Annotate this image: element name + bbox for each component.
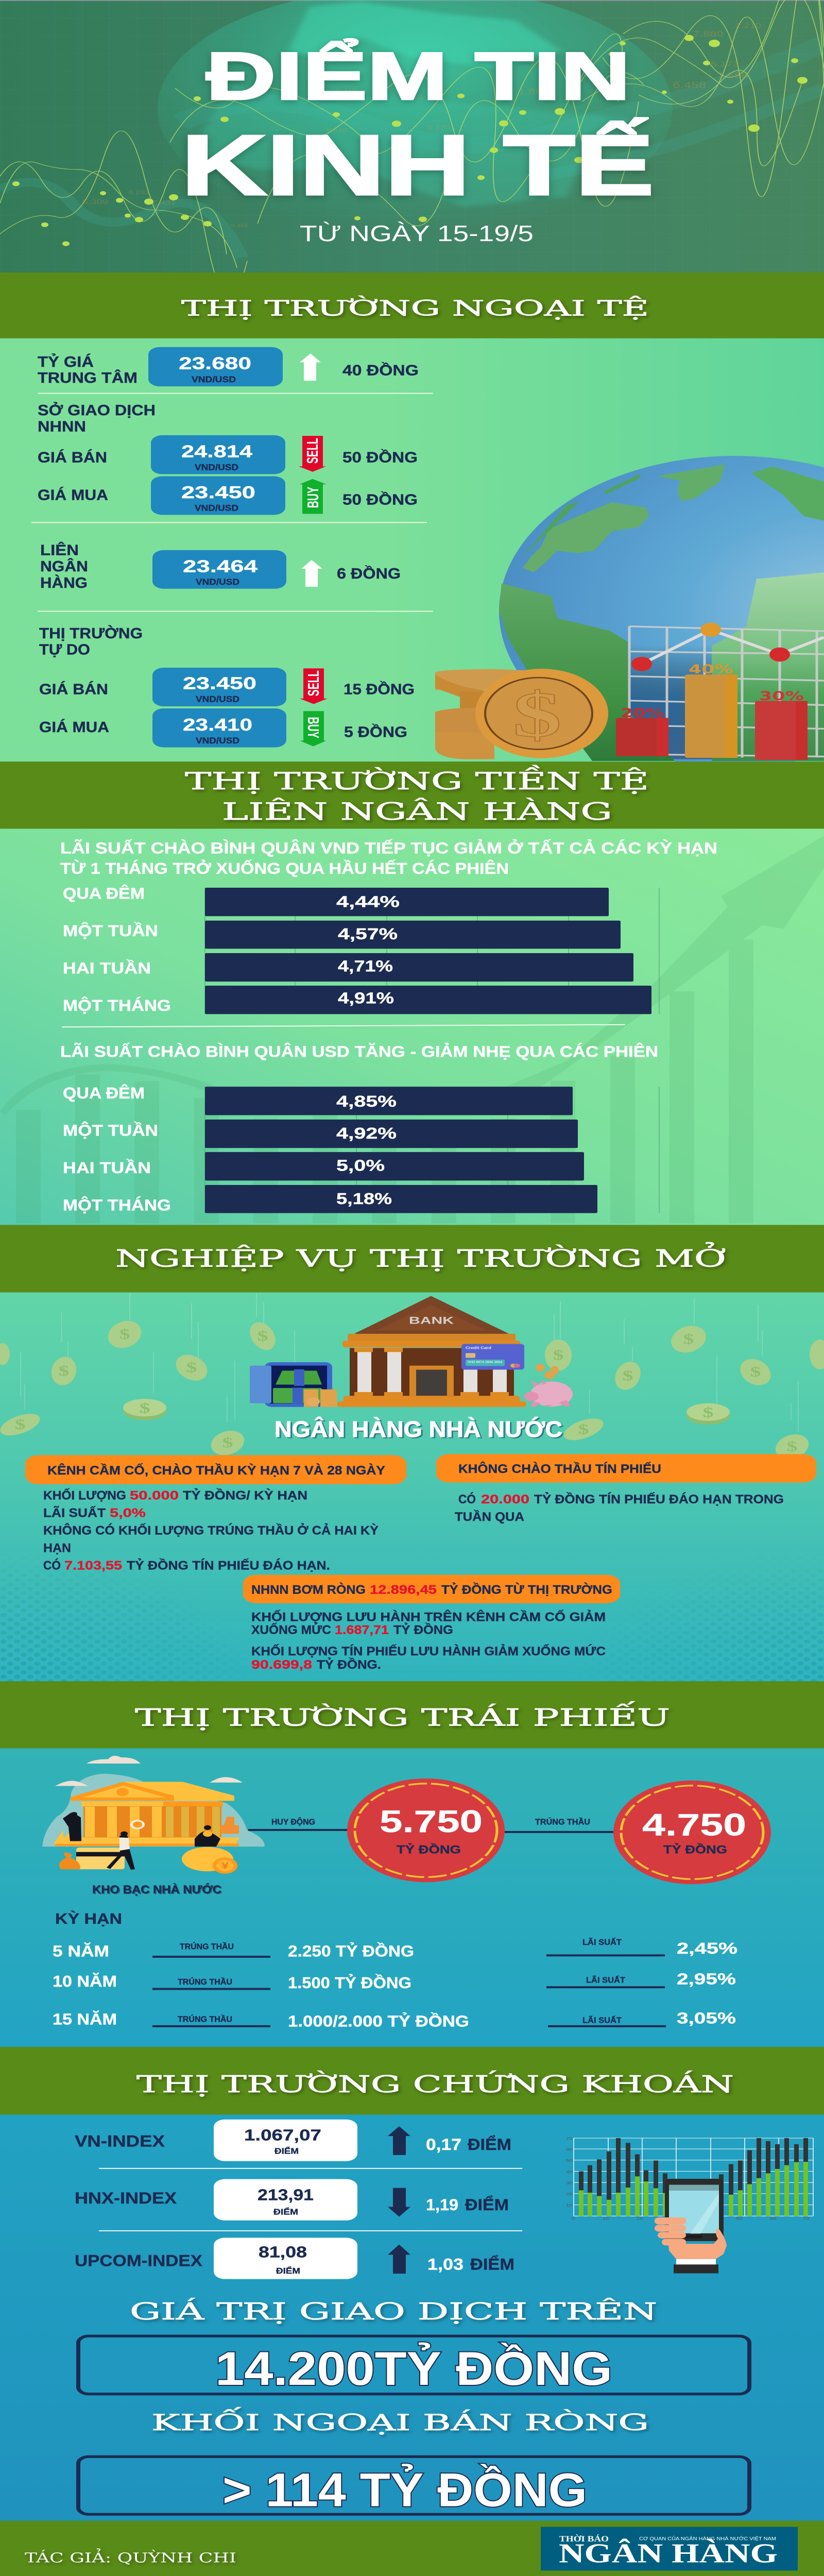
bar chart: VND rates: HAI TUẦN: [63, 959, 151, 977]
chart: stock bars: 70: [566, 2137, 572, 2141]
panel: header background: [0, 0, 824, 273]
table row: 10 years: TRÚNG THẦU: [178, 1977, 232, 1987]
bar chart: USD rates: 4,85%: [336, 1093, 397, 1110]
panel: collateral channel: 50.000: [130, 1489, 179, 1502]
logo: Thoi bao Ngan hang: [541, 2527, 798, 2570]
callout: foreign net sell: > 114 TỶ ĐỒNG: [222, 2463, 587, 2517]
row: free market rates: [39, 624, 415, 748]
decoration: floating coins: $: [222, 1434, 233, 1450]
row: free market rates: VND/USD: [196, 695, 239, 704]
chart decoration: small numbers: 2.210: [735, 22, 761, 29]
row: interbank rate: 6 ĐỒNG: [337, 565, 401, 582]
bar chart: VND rates: 4,71%: [338, 958, 393, 975]
row: VN-Index: 1.067,07: [244, 2127, 321, 2144]
chart decoration: small numbers: 5.173: [711, 60, 739, 68]
icon: credit card: [461, 1344, 524, 1370]
chart decoration: small numbers: 5.648: [327, 127, 347, 133]
table row: 15 years: LÃI SUẤT: [582, 2015, 622, 2025]
panel: net injection: NHNN BƠM RÒNG: [251, 1582, 366, 1597]
table row: 5 years: 5 NĂM: [53, 1942, 109, 1960]
illustration: globe with chart and coins: 40%: [689, 663, 733, 676]
heading: state bank: NGÂN HÀNG NHÀ NƯỚC: [276, 1417, 564, 1443]
row: free market rates: 15 ĐỒNG: [344, 681, 415, 698]
chart: stock bars: 70: [803, 2216, 809, 2221]
row: interbank rate: NGÂN: [40, 558, 88, 574]
row: HNX-Index: 1,19: [426, 2195, 458, 2214]
logo: Thoi bao Ngan hang: THỜI BÁO: [559, 2534, 609, 2544]
row: VN-Index: VN-INDEX: [75, 2132, 165, 2150]
chart decoration: small numbers: [82, 22, 761, 228]
icon: credit card: Credit Card: [466, 1346, 491, 1350]
row: central rate: [38, 347, 419, 386]
panel: net injection: [243, 1575, 620, 1671]
bar chart: USD rates: MỘT THÁNG: [63, 1196, 171, 1214]
table row: 5 years: TRÚNG THẦU: [180, 1942, 234, 1951]
bar chart: USD rates: QUA ĐÊM: [63, 1084, 145, 1102]
panel: collateral channel: TỶ ĐỒNG TÍN PHIẾU ĐÁO HẠN.: [127, 1558, 330, 1572]
table row: 10 years: [53, 1971, 736, 1992]
table row: 10 years: 10 NĂM: [53, 1973, 117, 1990]
panel: collateral channel: LÃI SUẤT: [43, 1506, 106, 1520]
table row: 15 years: [53, 2010, 736, 2030]
chart decoration: small numbers: 6.262: [129, 189, 149, 195]
decoration: floating coins: [0, 1318, 824, 1463]
decoration: floating coins: $: [258, 1328, 268, 1344]
table row: 10 years: 2,95%: [677, 1971, 736, 1988]
illustration: globe with chart and coins: 30%: [759, 689, 804, 703]
decoration: floating coins: $: [553, 1347, 563, 1363]
panel: no bill offering: 20.000: [481, 1493, 529, 1506]
row: HNX-Index: ĐIỂM: [465, 2195, 509, 2214]
panel: collateral channel: TỶ ĐỒNG/ KỲ HẠN: [183, 1488, 307, 1502]
row: SBV exchange rates: GIÁ MUA: [38, 486, 108, 503]
chart decoration: small numbers: 7.431: [152, 199, 176, 206]
title: [181, 39, 654, 213]
row: free market rates: 23.410: [183, 715, 252, 735]
panel: foreign exchange body: [0, 338, 824, 761]
row: interbank rate: HÀNG: [40, 574, 88, 591]
table row: 10 years: LÃI SUẤT: [586, 1976, 625, 1985]
row: SBV exchange rates: GIÁ BÁN: [38, 449, 107, 466]
row: free market rates: 23.450: [183, 674, 256, 693]
row: central rate: TRUNG TÂM: [38, 369, 138, 386]
decoration: floating coins: $: [140, 1400, 150, 1416]
table row: 5 years: 2,45%: [677, 1940, 737, 1957]
panel: no bill offering: CÓ: [458, 1492, 476, 1506]
decoration: floating coins: $: [15, 1416, 25, 1432]
table row: 15 years: 1.000/2.000 TỶ ĐỒNG: [288, 2012, 469, 2030]
chart: stock bars: 10: [566, 2204, 572, 2207]
table row: 10 years: 1.500 TỶ ĐỒNG: [288, 1974, 411, 1992]
row: SBV exchange rates: NHNN: [38, 418, 86, 435]
logo: Thoi bao Ngan hang: CƠ QUAN CỦA NGÂN HÀNG NHÀ NƯỚC VIỆT NAM: [639, 2536, 776, 2541]
icon: credit card: 7643 8974 3846 3864: [467, 1361, 502, 1364]
connector: raised: HUY ĐỘNG: [271, 1817, 315, 1826]
heading: money market: LIÊN NGÂN HÀNG: [222, 797, 612, 825]
callout: winning amount: [613, 1781, 771, 1884]
row: free market rates: BUY: [304, 717, 322, 738]
connector: winning: TRÚNG THẦU: [535, 1817, 590, 1826]
illustration: globe with chart and coins: $: [513, 679, 561, 750]
bar chart: VND rates: [63, 885, 659, 1014]
row: VN-Index: ĐIỂM: [274, 2146, 299, 2156]
callout: raised amount: [347, 1778, 505, 1882]
heading: state bank: NGÂN HÀNG NHÀ NƯỚC: [274, 1416, 562, 1442]
row: UPCOM-Index: 81,08: [259, 2244, 307, 2261]
row: HNX-Index: 213,91: [258, 2187, 314, 2204]
date subtitle: TỪ NGÀY 15-19/5: [300, 221, 534, 246]
bar chart: VND rates: 4,57%: [338, 926, 398, 943]
title: ĐIỂM TIN: [206, 39, 630, 114]
panel: net injection: KHỐI LƯỢNG TÍN PHIẾU LƯU HÀNH GIẢM XUỐNG MỨC: [251, 1644, 606, 1658]
chart decoration: waves and dots: [0, 0, 824, 296]
row: UPCOM-Index: ĐIỂM: [276, 2266, 300, 2276]
chart: stock bars: 10: [603, 2216, 609, 2221]
panel: collateral channel: CÓ: [43, 1558, 61, 1572]
bar chart: USD rates: [63, 1084, 659, 1214]
bar chart: USD rates: HAI TUẦN: [63, 1159, 151, 1177]
panel: collateral channel: 7.103,55: [64, 1559, 122, 1572]
chart decoration: small numbers: 2.614: [400, 94, 423, 100]
chart: stock bars: 50: [736, 2216, 742, 2221]
table row: 15 years: TRÚNG THẦU: [178, 2014, 232, 2024]
icon: open safe with money: [250, 1362, 337, 1407]
panel: footer: [0, 2521, 824, 2576]
row: SBV exchange rates: 50 ĐỒNG: [342, 491, 418, 508]
panel: net injection: 90.699,8: [251, 1658, 312, 1671]
table row: 15 years: 15 NĂM: [53, 2010, 117, 2028]
heading: bonds: THỊ TRƯỜNG TRÁI PHIẾU: [135, 1701, 670, 1731]
logo: Thoi bao Ngan hang: NGÂN HÀNG: [559, 2538, 778, 2568]
row: SBV exchange rates: VND/USD: [195, 463, 238, 472]
chart decoration: small numbers: 1.894: [518, 88, 549, 96]
row: SBV exchange rates: SELL: [303, 438, 321, 464]
callout: trading value: 14.200TỶ ĐỒNG: [215, 2342, 612, 2395]
chart: stock bars: 60: [770, 2216, 776, 2221]
decoration: floating coins: $: [119, 1326, 130, 1342]
row: UPCOM-Index: UPCOM-INDEX: [75, 2251, 202, 2270]
decoration: floating coins: $: [186, 1359, 197, 1375]
row: free market rates: SELL: [304, 670, 322, 696]
heading: money market: [185, 765, 649, 825]
row: HNX-Index: [75, 2179, 509, 2221]
chart: stock bars: 20: [637, 2216, 643, 2221]
decoration: floating coins: $: [623, 1367, 633, 1383]
callout: foreign net sell: [78, 2456, 749, 2517]
table row: 15 years: 3,05%: [677, 2010, 736, 2027]
chart decoration: small numbers: 6.458: [673, 80, 706, 90]
chart decoration: small numbers: 9.465: [231, 223, 249, 228]
heading: term: KỲ HẠN: [55, 1910, 122, 1927]
row: free market rates: 5 ĐỒNG: [344, 723, 407, 740]
chart: stock bars: 0: [572, 2216, 575, 2221]
row: SBV exchange rates: 50 ĐỒNG: [342, 449, 418, 466]
row: free market rates: TỰ DO: [39, 641, 90, 658]
chart decoration: small numbers: 1.696: [717, 71, 748, 80]
illustration: globe with chart and coins: 20%: [621, 706, 664, 720]
heading: trading value: GIÁ TRỊ GIAO DỊCH TRÊN: [130, 2298, 657, 2325]
bar chart: VND rates: 4,44%: [336, 893, 400, 911]
connector: winning: [505, 1817, 613, 1833]
chart: stock bars: 60: [566, 2147, 572, 2151]
row: central rate: TỶ GIÁ: [38, 353, 94, 370]
panel: net injection: TỶ ĐỒNG.: [317, 1657, 381, 1671]
illustration: state treasury: [42, 1756, 265, 1874]
row: HNX-Index: ĐIỂM: [273, 2208, 298, 2217]
panel: no bill offering: [436, 1454, 816, 1523]
panel: section bar stocks: [0, 2047, 824, 2115]
panel: no bill offering: KHÔNG CHÀO THẦU TÍN PHIẾU: [458, 1462, 661, 1476]
decoration: halftone dots: [0, 1552, 824, 1681]
table row: 5 years: [53, 1938, 737, 1960]
panel: net injection: 1.687,71: [335, 1623, 389, 1637]
callout: raised amount: TỶ ĐỒNG: [397, 1842, 461, 1856]
decoration: floating coins: $: [787, 1438, 797, 1454]
table row: 5 years: 2.250 TỶ ĐỒNG: [288, 1942, 414, 1960]
row: SBV exchange rates: VND/USD: [195, 503, 238, 513]
panel: open market body: [0, 1293, 824, 1682]
row: free market rates: GIÁ BÁN: [39, 681, 108, 698]
row: free market rates: VND/USD: [196, 736, 239, 745]
illustration: globe with chart and coins: [435, 456, 824, 767]
row: central rate: VND/USD: [192, 375, 236, 384]
icon: hand holding phone: [655, 2179, 727, 2273]
chart decoration: small numbers: 6.219: [336, 87, 357, 93]
row: UPCOM-Index: [75, 2238, 514, 2279]
row: VN-Index: [75, 2120, 511, 2161]
bar chart: USD rates: 5,0%: [336, 1157, 385, 1174]
heading: money market: THỊ TRƯỜNG TIỀN TỆ: [185, 765, 649, 795]
panel: collateral channel: KÊNH CẦM CỐ, CHÀO THẦU KỲ HẠN 7 VÀ 28 NGÀY: [47, 1463, 385, 1477]
panel: collateral channel: HẠN: [43, 1541, 71, 1555]
chart: stock bars: 20: [566, 2192, 572, 2196]
chart decoration: small numbers: 7.889: [693, 30, 724, 39]
panel: stocks body: [0, 2115, 824, 2521]
heading: stocks: THỊ TRƯỜNG CHỨNG KHOÁN: [136, 2071, 734, 2098]
decoration: floating coins: $: [683, 1331, 694, 1347]
row: interbank rate: VND/USD: [196, 578, 239, 587]
panel: collateral channel: 5,0%: [110, 1506, 146, 1520]
row: interbank rate: LIÊN: [40, 541, 79, 558]
panel: net injection: 12.896,45: [370, 1583, 437, 1597]
bar chart: VND rates: QUA ĐÊM: [63, 885, 145, 903]
panel: collateral channel: KHÔNG CÓ KHỐI LƯỢNG TRÚNG THẦU Ở CẢ HAI KỲ: [43, 1523, 379, 1537]
row: central rate: 40 ĐỒNG: [342, 362, 419, 379]
panel: net injection: TỶ ĐỒNG: [393, 1622, 453, 1637]
panel: section bar open market: [0, 1225, 824, 1293]
decoration: floating coins: $: [703, 1404, 713, 1420]
callout: raised amount: 5.750: [380, 1804, 483, 1839]
heading: state bank: [274, 1416, 564, 1443]
bar chart: USD rates: 5,18%: [336, 1190, 392, 1208]
heading: foreign exchange: THỊ TRƯỜNG NGOẠI TỆ: [181, 296, 649, 321]
panel: money market body: [0, 829, 824, 1225]
bar chart: VND rates: MỘT THÁNG: [63, 996, 171, 1014]
row: SBV exchange rates: [38, 401, 418, 515]
row: UPCOM-Index: ĐIỂM: [470, 2255, 514, 2273]
chart: stock bars: [566, 2137, 813, 2221]
panel: section bar money market: [0, 761, 824, 829]
bar chart: VND rates: MỘT TUẦN: [63, 922, 158, 940]
illustration: bank building: [337, 1297, 526, 1407]
bar chart: USD rates: MỘT TUẦN: [63, 1122, 158, 1140]
connector: raised: [248, 1817, 347, 1831]
row: VN-Index: ĐIỂM: [468, 2134, 511, 2154]
heading: VND rate text: [60, 839, 717, 877]
chart decoration: small numbers: 5.170: [427, 124, 451, 131]
title: KINH TẾ: [181, 117, 654, 213]
panel: section bar foreign exchange: [0, 273, 824, 338]
bar chart: USD rates: 4,92%: [336, 1125, 397, 1142]
row: SBV exchange rates: 24.814: [181, 442, 252, 461]
decoration: rising arrow and stripes: [0, 836, 824, 1223]
row: VN-Index: 0,17: [426, 2135, 461, 2154]
decoration: floating coins: $: [750, 1364, 761, 1380]
row: SBV exchange rates: 23.450: [181, 483, 255, 502]
bar chart: VND rates: 4,91%: [338, 990, 394, 1007]
panel: collateral channel: KHỐI LƯỢNG: [43, 1488, 126, 1502]
decoration: floating coins: $: [578, 1421, 589, 1437]
heading: open market: NGHIỆP VỤ THỊ TRƯỜNG MỞ: [115, 1242, 726, 1272]
panel: collateral channel: [25, 1455, 406, 1572]
panel: net injection: TỶ ĐỒNG TỪ THỊ TRƯỜNG: [441, 1582, 612, 1597]
row: SBV exchange rates: BUY: [304, 486, 322, 508]
chart decoration: data points: [12, 35, 808, 246]
icon: piggy bank: [524, 1364, 573, 1406]
panel: net injection: KHỐI LƯỢNG LƯU HÀNH TRÊN KÊNH CẦM CỐ GIẢM: [251, 1609, 606, 1624]
chart: stock bars: 50: [566, 2159, 572, 2163]
chart: stock bars: 40: [566, 2170, 572, 2174]
table row: 5 years: LÃI SUẤT: [582, 1938, 622, 1947]
callout: winning amount: 4.750: [642, 1808, 746, 1842]
chart decoration: small numbers: 5.309: [82, 198, 108, 206]
label: state treasury: KHO BẠC NHÀ NƯỚC: [92, 1883, 221, 1896]
illustration: state treasury: ¥: [221, 1860, 229, 1871]
row: SBV exchange rates: SỞ GIAO DỊCH: [38, 401, 156, 418]
panel: no bill offering: TUẦN QUA: [455, 1510, 524, 1523]
panel: bonds body: [0, 1748, 824, 2047]
callout: winning amount: TỶ ĐỒNG: [663, 1842, 727, 1856]
row: central rate: 23.680: [179, 354, 251, 373]
row: free market rates: GIÁ MUA: [39, 719, 109, 735]
text: author: TÁC GIẢ: QUỲNH CHI: [25, 2548, 236, 2566]
chart: stock bars: 30: [566, 2181, 572, 2185]
panel: section bar bonds: [0, 1681, 824, 1748]
label: state treasury: [92, 1883, 222, 1897]
label: state treasury: KHO BẠC NHÀ NƯỚC: [93, 1883, 222, 1897]
panel: net injection: XUỐNG MỨC: [251, 1622, 331, 1637]
decoration: floating coins: $: [59, 1363, 69, 1379]
illustration: bank building: BANK: [409, 1315, 454, 1326]
row: HNX-Index: HNX-INDEX: [75, 2189, 177, 2207]
row: interbank rate: 23.464: [183, 557, 258, 576]
callout: trading value: [78, 2336, 749, 2395]
row: free market rates: THỊ TRƯỜNG: [39, 624, 143, 641]
row: UPCOM-Index: 1,03: [427, 2255, 464, 2273]
heading: foreign net sell: KHỐI NGOẠI BÁN RÒNG: [151, 2408, 649, 2435]
row: interbank rate: [40, 541, 401, 591]
heading: VND rate text: TỪ 1 THÁNG TRỞ XUỐNG QUA HẦU HẾT CÁC PHIÊN: [60, 859, 509, 877]
